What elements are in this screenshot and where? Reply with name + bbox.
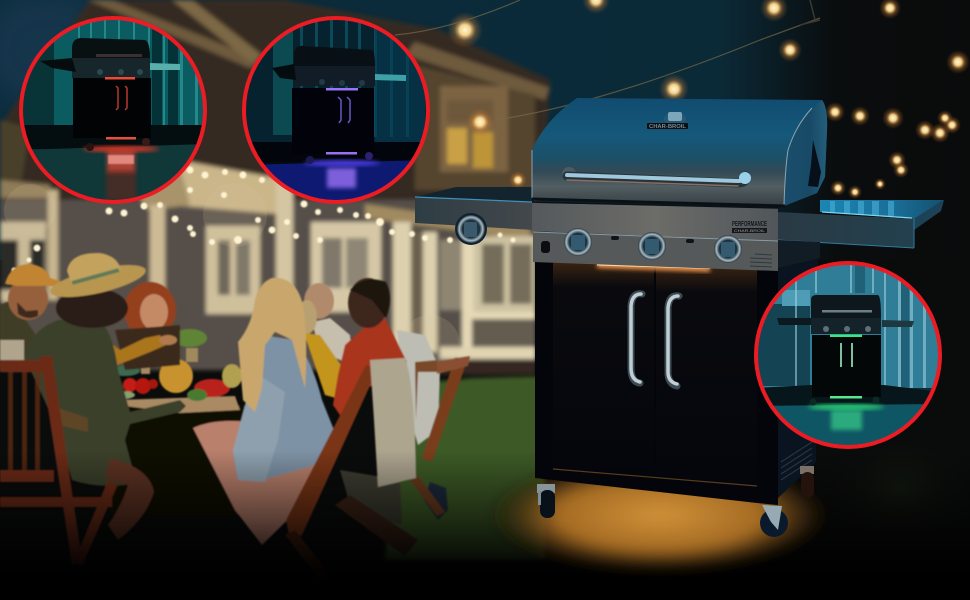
food on the table [110,329,242,401]
background: tree bokeh lights [760,0,970,199]
casters [537,466,814,537]
grill lid [532,98,827,206]
background: house [0,0,550,375]
red-haired woman [100,282,180,370]
column [150,205,165,315]
glow under the grill [488,457,832,573]
background: lawn [385,376,970,560]
door handles [631,294,679,386]
main grill [415,98,944,537]
pale shirt person and far chair [397,330,470,520]
inset circle: red light [20,17,206,203]
lens flares [4,183,460,375]
woman with straw hat [25,253,186,540]
lid handle [562,167,751,186]
temperature gauge knob [664,112,686,126]
old man in white shirt [304,283,353,365]
inset circle: purple light [243,17,429,203]
right side shelf [778,200,944,268]
left side shelf [415,187,534,245]
right window [311,222,381,312]
middle window [206,226,260,314]
walls [0,200,535,370]
background: string lights on porch [12,0,820,272]
wooden chair left [0,356,118,566]
PERFORMANCE badge: PERFORMANCE [732,221,767,228]
table [117,396,240,413]
upper control panel [532,202,778,241]
chair with draped towel [285,358,418,578]
man with orange cap [0,264,60,362]
PERFORMANCE badge: CHAR-BROIL [734,228,766,233]
brand badge: CHAR-BROIL [649,124,686,130]
LED light strip [597,262,710,272]
man in red jacket [333,278,407,418]
brand badge [647,123,688,130]
dark area under the table [110,405,260,515]
PERFORMANCE badge [732,221,767,233]
left window [0,222,46,302]
inset circle: green light [756,263,940,447]
person in yellow shirt [297,300,343,400]
burner control panel [533,228,778,271]
bottom vignette [0,450,970,600]
roof [0,0,550,240]
people at the dinner table [0,253,470,578]
blonde woman in denim jacket [193,278,340,545]
grill cabinet [535,240,818,505]
